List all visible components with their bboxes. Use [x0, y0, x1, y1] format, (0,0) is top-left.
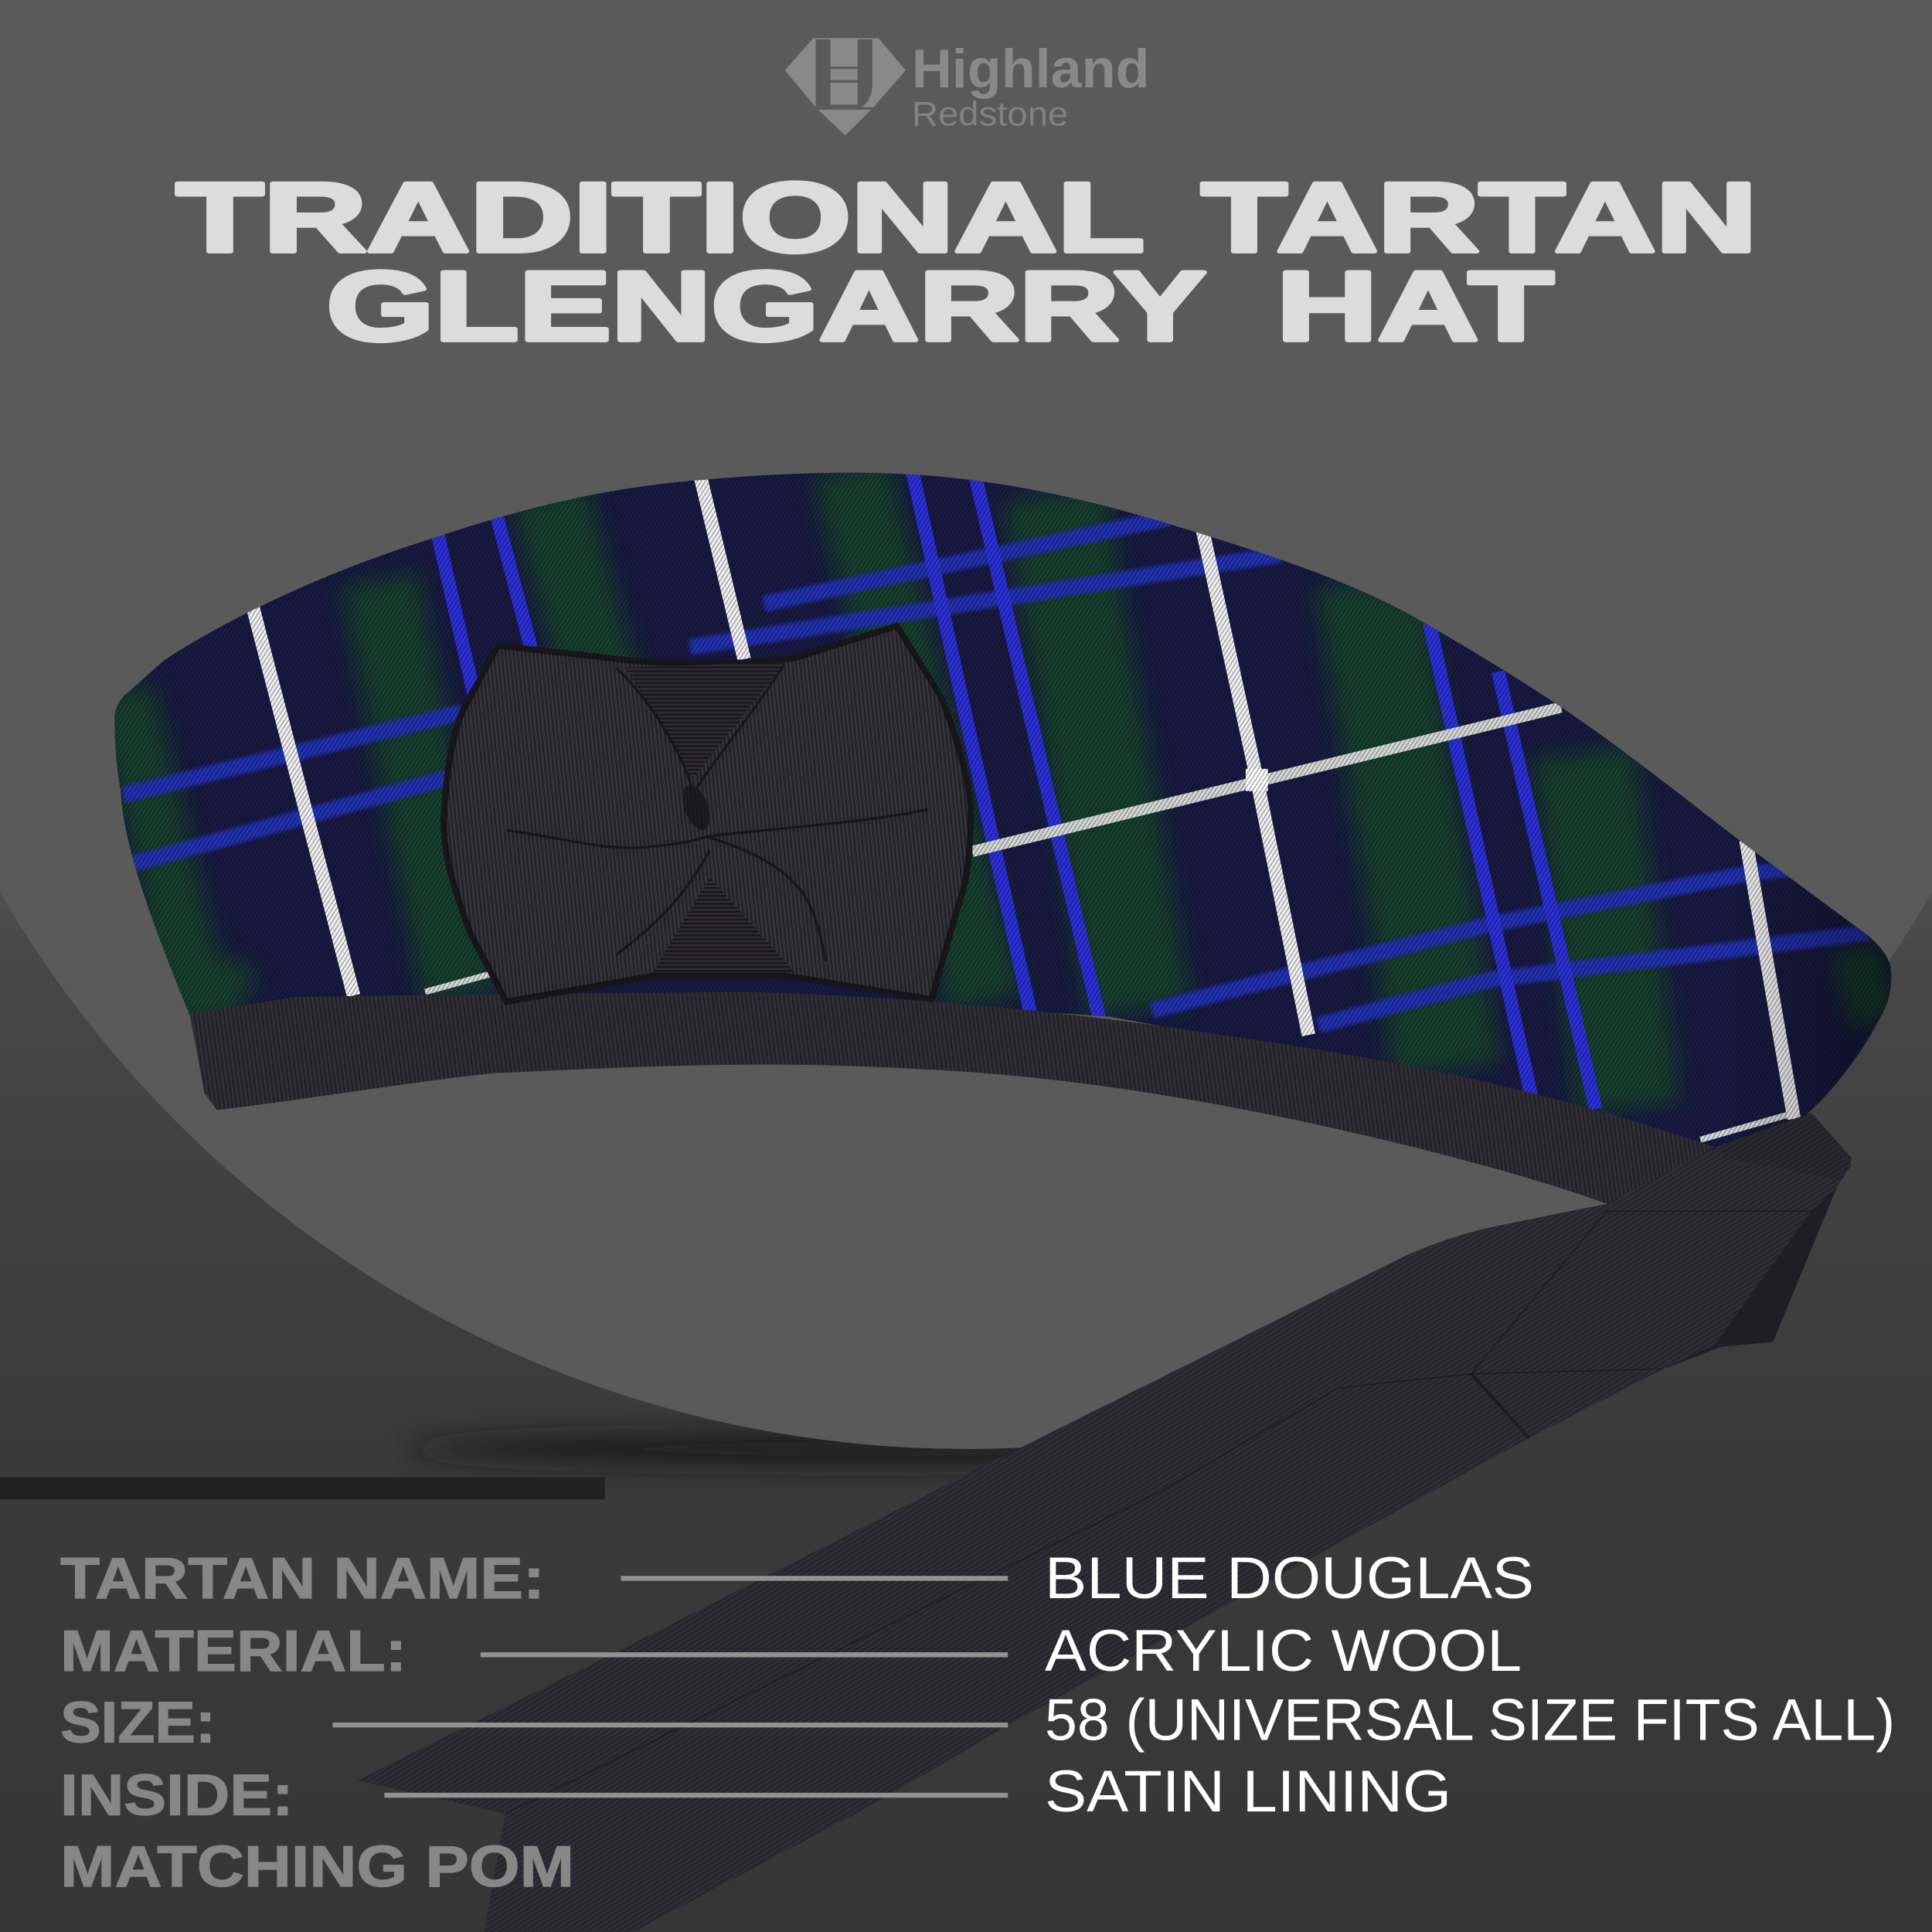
bow centre triangles — [626, 662, 794, 972]
white stripes — [253, 474, 1794, 1119]
bow folds — [506, 665, 928, 961]
spec values: 58 (UNIVERSAL SIZE FITS ALL) — [1045, 1687, 1895, 1753]
spec labels: MATERIAL: — [60, 1618, 406, 1683]
tail dark fold — [1663, 1186, 1837, 1369]
ribbon knot — [1715, 1113, 1852, 1180]
logo — [785, 38, 1150, 135]
tail creases — [505, 1211, 1811, 1814]
spec labels: MATCHING POM — [60, 1834, 574, 1899]
leader lines — [332, 1576, 1008, 1798]
background circle — [0, 0, 1932, 1466]
spec values: SATIN LINING — [1045, 1759, 1451, 1825]
spec labels: TARTAN NAME: — [60, 1546, 545, 1611]
horizontal blue stripes — [123, 518, 1869, 1026]
title: TARTAN — [1202, 163, 1757, 273]
divider bar — [0, 1478, 605, 1499]
hat crown: tartan fabric — [99, 456, 1910, 1158]
bow — [444, 626, 971, 1002]
ribbon tail — [357, 1113, 1852, 1932]
logo subtitle: Redstone — [912, 96, 1068, 134]
logo wordmark: Highland — [912, 38, 1150, 99]
icon: diamond monogram — [785, 38, 906, 135]
bow knot — [684, 786, 709, 830]
spec values — [1045, 1546, 1895, 1825]
title: GLENGARRY — [327, 252, 1206, 362]
spec values: BLUE DOUGLAS — [1045, 1546, 1534, 1611]
spec values: ACRYLIC WOOL — [1045, 1618, 1522, 1684]
vertical blue stripes — [437, 468, 1596, 1109]
title: TRADITIONAL — [176, 163, 1145, 273]
spec labels: INSIDE: — [60, 1763, 293, 1828]
title — [176, 163, 1757, 362]
spec labels — [60, 1546, 574, 1899]
hat band — [190, 992, 1715, 1204]
title: HAT — [1277, 252, 1554, 362]
green tartan bands — [123, 468, 1879, 1109]
spec labels: SIZE: — [60, 1689, 216, 1754]
